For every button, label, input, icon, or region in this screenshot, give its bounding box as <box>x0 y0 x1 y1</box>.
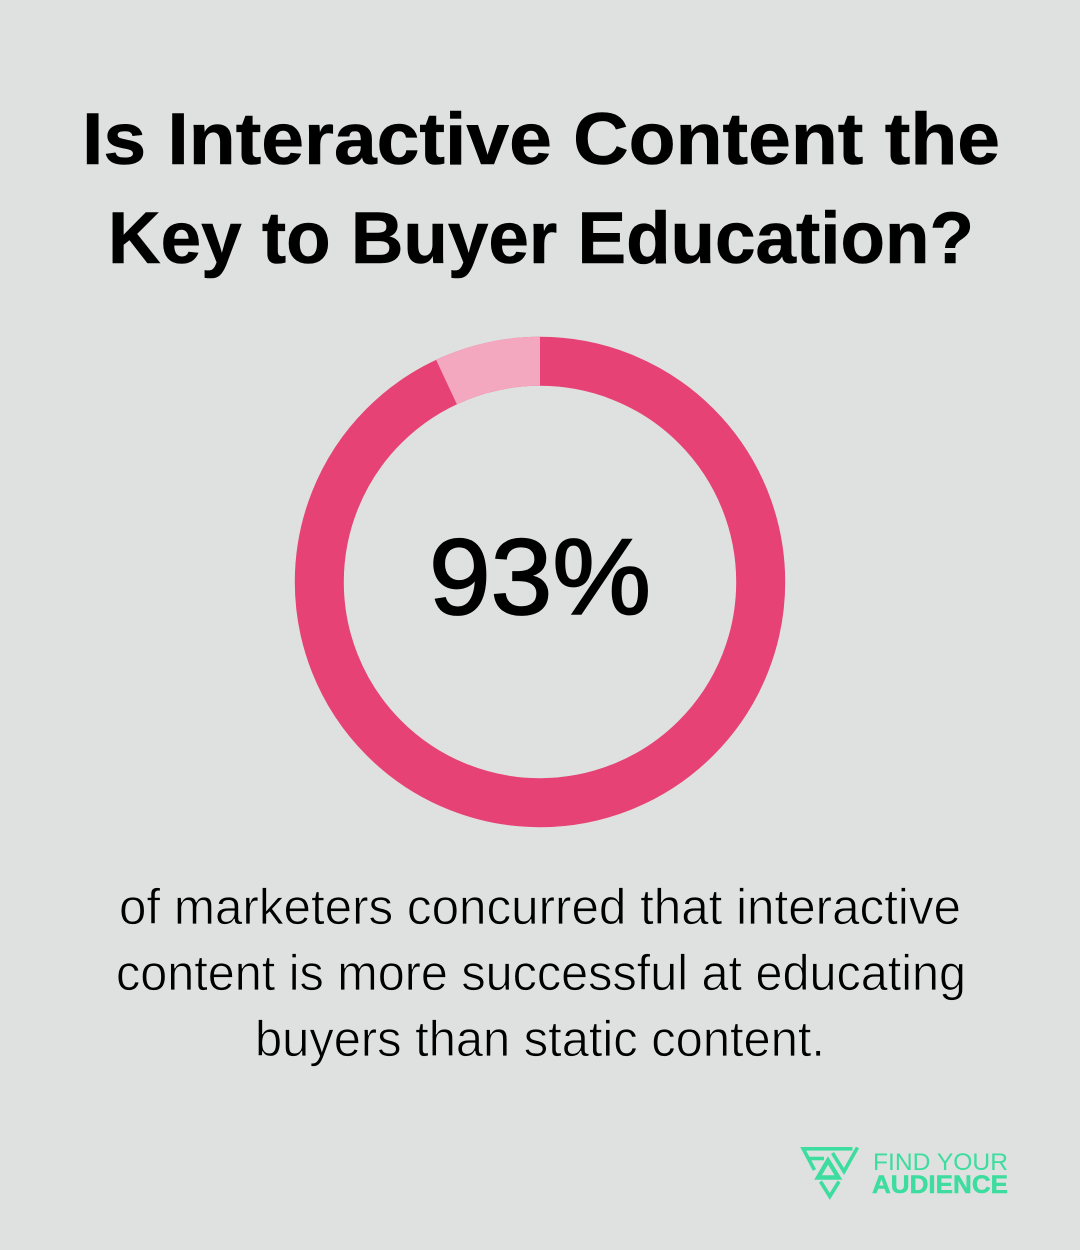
icon: logo triangles <box>803 1148 858 1196</box>
logo wordmark <box>872 1149 1008 1199</box>
description text: content is more successful at educating <box>116 945 966 1001</box>
donut chart: 93% <box>319 361 761 803</box>
title: Key to Buyer Education? <box>108 198 974 279</box>
logo wordmark: FIND YOUR <box>873 1149 1008 1176</box>
title <box>82 99 1000 279</box>
title: Is Interactive Content the <box>82 99 1000 180</box>
description text: buyers than static content. <box>255 1011 825 1067</box>
donut value: 93% <box>429 516 651 637</box>
logo: Find Your Audience <box>803 1148 1008 1199</box>
logo wordmark: AUDIENCE <box>872 1171 1008 1199</box>
description text: of marketers concurred that interactive <box>119 879 961 935</box>
description text <box>116 879 966 1067</box>
